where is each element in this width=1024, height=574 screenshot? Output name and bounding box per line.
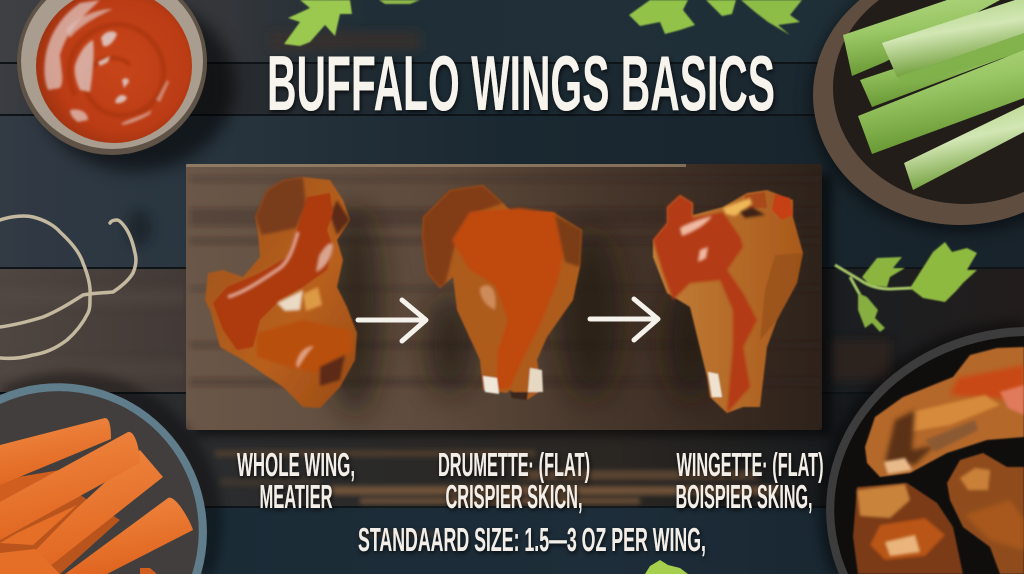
label: drumette: CRISPIER SKICN,	[446, 478, 582, 515]
wing 1: whole wing	[205, 177, 357, 408]
wing 3: wingette	[653, 190, 803, 413]
arrow 1	[358, 300, 426, 341]
wing 2: drumette	[422, 185, 582, 400]
label: whole wing: WHOLE WING,	[237, 446, 355, 483]
bowl: carrots	[0, 371, 222, 574]
label: drumette	[438, 446, 590, 515]
bowl: celery sticks	[810, 0, 1024, 232]
bowl: buffalo sauce	[17, 0, 235, 171]
top wing	[865, 347, 1024, 477]
celery leaf: right	[835, 242, 977, 332]
right wing	[947, 453, 1024, 574]
twine	[0, 210, 152, 358]
lower-left wing	[853, 483, 963, 574]
bowl: buffalo wings	[818, 320, 1024, 574]
arrow 2	[590, 299, 658, 340]
label: whole wing	[237, 446, 355, 515]
text: DRUMETTE· (FLAT)	[438, 446, 590, 483]
text: WINGETTE· (FLAT)	[676, 446, 824, 483]
label: wingette: BOISPIER SKING,	[676, 478, 812, 515]
cutting board	[186, 164, 832, 436]
celery leaves: top	[284, 0, 802, 46]
standard size note: STANDAARD SIZE: 1.5—3 OZ PER WING,	[358, 521, 706, 558]
label: wingette	[676, 446, 824, 515]
celery leaf: bottom	[645, 560, 688, 574]
shadows under wings	[327, 205, 715, 415]
label: whole wing: MEATIER	[260, 478, 333, 515]
